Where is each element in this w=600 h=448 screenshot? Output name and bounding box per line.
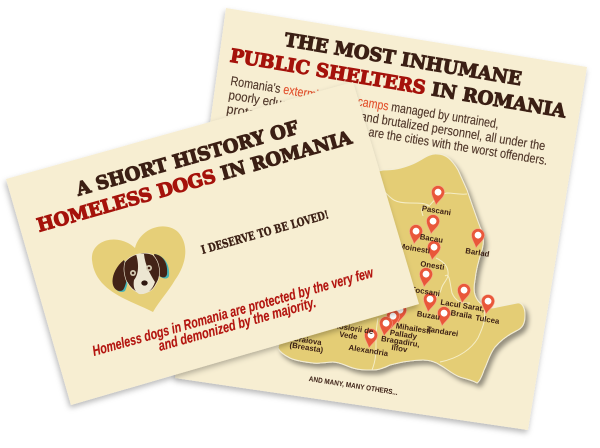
map city labels: Tulcea: [475, 313, 501, 326]
map city labels: Braila: [450, 308, 473, 321]
back card intro text: and brutalized personnel, all under the: [360, 109, 547, 153]
back card intro text: are the cities with the worst offenders.: [368, 124, 549, 168]
footnote: AND MANY, MANY OTHERS...: [308, 374, 399, 397]
front card title: HOMELESS DOGS IN ROMANIA: [35, 128, 355, 237]
map city labels: Alexandria: [348, 343, 389, 358]
icon: dog head: [112, 253, 169, 294]
map city labels: Moinesti: [398, 242, 431, 255]
map city labels: Lacul Sarat,: [440, 298, 485, 313]
back card intro text: Romania's extermination: [230, 73, 348, 107]
map pins: [363, 185, 495, 349]
map city labels: Craiova: [293, 334, 323, 347]
map city labels: Bragadiru,: [380, 334, 420, 349]
back card title: THE MOST INHUMANE: [283, 30, 523, 90]
back card intro text: [226, 73, 549, 168]
map city labels: Focsani: [410, 285, 441, 298]
map city labels: [289, 204, 501, 358]
back card intro text: camps managed by untrained,: [357, 94, 500, 131]
map city labels: Ilfov: [391, 343, 409, 354]
red statement: Homeless dogs in Romania are protected by the very few: [91, 265, 376, 360]
map city labels: Rosiorii de: [333, 321, 375, 336]
back card intro text: poorly educated: [228, 87, 311, 115]
map city labels: Pascani: [421, 204, 452, 217]
map city labels: (Breasta): [289, 340, 324, 355]
map city labels: Onesti: [420, 259, 445, 272]
red statement: and demonized by the majority.: [157, 295, 318, 355]
map city labels: Bacau: [419, 232, 444, 245]
dog speech text: I DESERVE TO BE LOVED!: [199, 207, 330, 257]
front card title: A SHORT HISTORY OF: [73, 118, 301, 201]
map city labels: Barlad: [465, 246, 490, 259]
red statement: [91, 265, 376, 360]
panel: back card public shelters: [175, 8, 587, 430]
map city labels: Tandarei: [426, 325, 459, 338]
back card intro text: protection of: [226, 101, 297, 127]
map of Romania: [278, 154, 525, 383]
map city labels: Mihailesti: [395, 321, 432, 336]
back card title: PUBLIC SHELTERS IN ROMANIA: [229, 46, 568, 123]
panel: front card homeless dogs: [6, 82, 419, 405]
map city labels: Pallady: [389, 328, 418, 341]
icon: heart with dog: [92, 226, 185, 312]
map road lines: [372, 190, 485, 370]
map city labels: Buzau: [416, 309, 441, 322]
map city labels: Vede: [339, 330, 359, 342]
